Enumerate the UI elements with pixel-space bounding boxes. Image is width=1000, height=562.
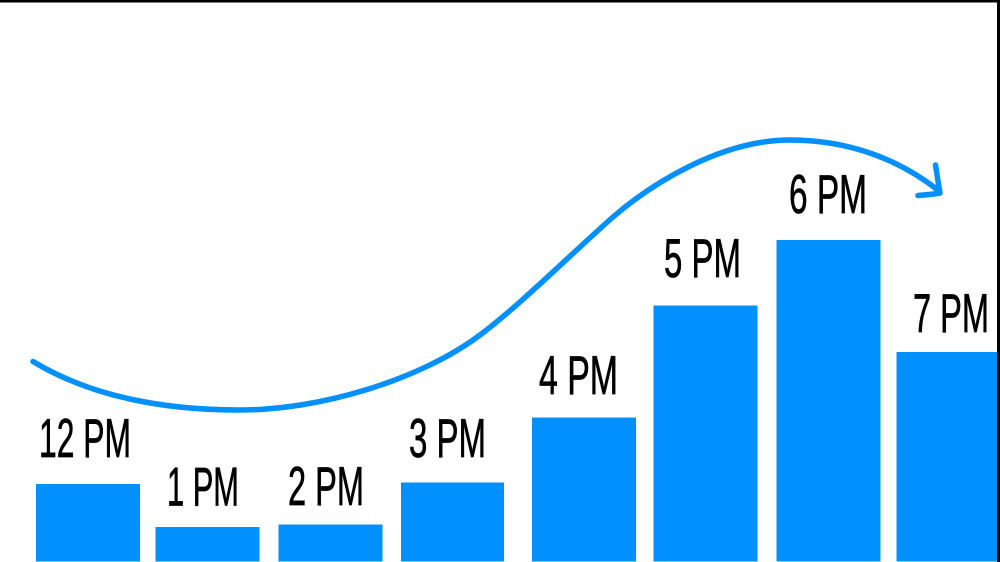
label: 3 PM: 3 PM (409, 408, 486, 469)
label: 12 PM: 12 PM (39, 408, 131, 469)
label: 4 PM: 4 PM (539, 345, 618, 406)
arrow: rising trend curve (33, 140, 940, 410)
frame: top edge (0, 0, 1000, 2)
frame: right edge (997, 0, 1000, 562)
bar: 5 PM (654, 306, 758, 562)
label: 2 PM: 2 PM (288, 456, 364, 517)
bar: 7 PM (896, 352, 998, 562)
label: 6 PM: 6 PM (789, 164, 867, 225)
bar: 1 PM (156, 527, 260, 562)
label: 1 PM: 1 PM (167, 456, 239, 518)
bar: 4 PM (532, 418, 636, 562)
bar: 6 PM (776, 240, 880, 562)
bar: 2 PM (278, 524, 382, 562)
bar: 12 PM (36, 484, 140, 562)
label: 5 PM: 5 PM (664, 228, 741, 289)
bar: 3 PM (401, 482, 504, 562)
